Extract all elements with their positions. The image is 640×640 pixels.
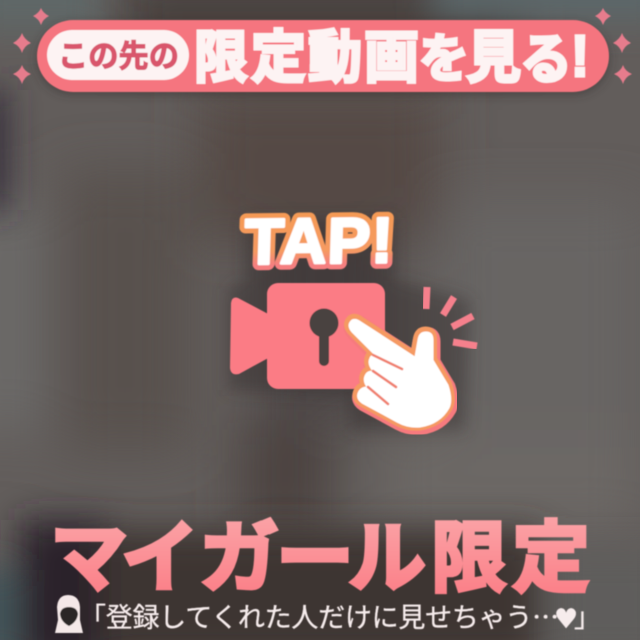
heading: 限定動画を見る!: る [520,30,572,90]
caption: 登録してくれた人だけに見せちゃう…♥: 「登録してくれた人だけに見せちゃう… [79,596,559,635]
finger lines [368,355,402,404]
heading: マイガール限定: イ [121,514,199,602]
heading: マイガール限定: マ [50,514,128,602]
icon: woman silhouette [55,595,83,633]
heading: 限定動画を見る!: 限 [194,26,248,90]
camera lens [230,298,272,374]
pill label: この先の [47,30,189,80]
banner: この先の限定動画を見る! [37,20,609,92]
heading: マイガール限定: ー [276,514,354,602]
sparkles around the banner [13,8,632,84]
camera body [267,283,385,389]
heading: 限定動画を見る! [194,24,589,90]
heading: マイガール限定: ル [348,514,426,602]
icon: locked video camera [230,283,385,389]
icon: tapping hand [348,318,452,429]
heading: 限定動画を見る!: ! [571,24,589,89]
heading: 限定動画を見る!: 見 [466,26,521,90]
caption: 登録してくれた人だけに見せちゃう…♥: ♥ [554,604,578,635]
heading: 限定動画を見る!: を [419,31,469,89]
heading: マイガール限定: ガ [199,514,279,602]
orange inner outline [348,318,450,426]
keyhole [310,308,338,366]
pill label: この先の: この先の [58,39,179,74]
outer outline [350,321,452,429]
heading: 限定動画を見る!: 定 [251,26,306,90]
TAP! callout: TAP! [244,204,394,278]
tap burst lines [426,287,477,346]
caption: 登録してくれた人だけに見せちゃう…♥: 」 [574,596,601,635]
heading: 限定動画を見る!: 画 [364,26,419,90]
heading: マイガール限定 [50,514,590,602]
heading: マイガール限定: 限 [431,514,507,602]
banner shadow [37,24,609,94]
dark halo behind icon [228,218,470,430]
heading: 限定動画を見る!: 動 [308,26,362,90]
heading: マイガール限定: 定 [512,514,590,602]
white hand [349,319,451,427]
TAP! callout: TAP! [244,204,394,278]
